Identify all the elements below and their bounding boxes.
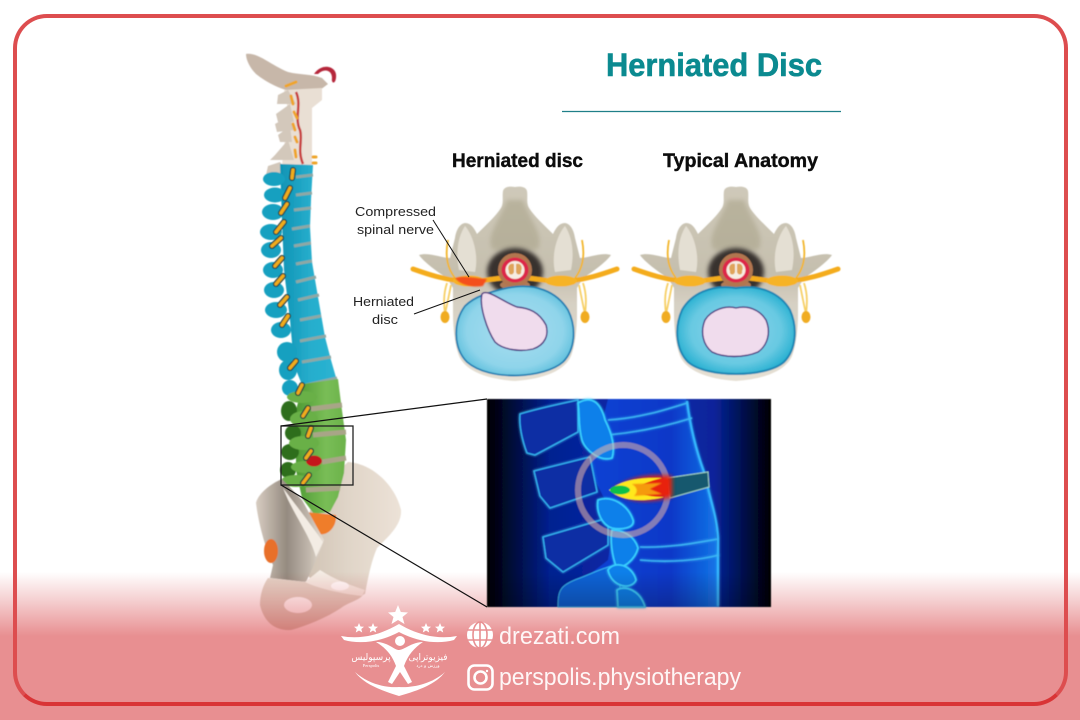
- thoracic discs: [292, 175, 337, 385]
- right ilium: [296, 462, 401, 604]
- atlas: [246, 54, 328, 92]
- logo figure: [376, 636, 423, 684]
- callout box on spine: [281, 426, 353, 485]
- spine model: [246, 54, 401, 630]
- diagram: typical anatomy cross-section: [634, 187, 838, 381]
- nerve roots: [272, 170, 311, 483]
- logo text: [351, 653, 448, 669]
- thoracic body: [280, 164, 337, 392]
- hot spot orange: [632, 483, 662, 496]
- label: herniated disc: disc: [372, 312, 399, 327]
- facet joints: [578, 400, 645, 607]
- heading: typical anatomy: Typical Anatomy: [663, 151, 818, 172]
- logo text: ورزش و درد: [416, 664, 440, 669]
- processes: [520, 400, 608, 572]
- logo text: فیزیوتراپی: [408, 653, 448, 663]
- label: herniated disc: Herniated: [353, 294, 414, 309]
- hot spot yellow: [609, 478, 664, 500]
- sacrum orange: [304, 512, 336, 534]
- logo stars: [354, 605, 445, 632]
- diagram: herniated disc cross-section: [413, 187, 617, 381]
- logo swoosh: [341, 624, 457, 642]
- website text: drezati.com: [499, 623, 620, 650]
- pointer: compressed spinal nerve: [433, 220, 469, 277]
- icon: instagram: [468, 666, 492, 690]
- left ilium: [256, 479, 324, 582]
- disc outlines: [608, 403, 719, 561]
- pointer: herniated disc: [414, 290, 480, 314]
- disc: [677, 287, 795, 374]
- icon: globe: [467, 622, 493, 648]
- lumbar body: [296, 379, 346, 514]
- red herniation blob: [306, 456, 322, 466]
- pubis: [260, 570, 365, 630]
- logo text: Perspolis: [363, 663, 379, 668]
- nucleus: [703, 307, 768, 356]
- instagram handle text: perspolis.physiotherapy: [499, 664, 741, 691]
- nucleus: [481, 293, 547, 350]
- label: herniated disc: [353, 294, 414, 327]
- compressed nerve: [455, 277, 487, 287]
- logo text: پرسپولیس: [351, 653, 391, 663]
- vertebral column: [560, 399, 719, 607]
- disc: [456, 286, 574, 376]
- ring highlight: [578, 445, 668, 535]
- lumbar processes: [280, 401, 301, 478]
- hot spot red: [612, 475, 672, 501]
- x-ray image of lumbar spine: [487, 399, 771, 607]
- hot spot green core: [610, 486, 630, 494]
- title: Herniated Disc: [606, 47, 822, 83]
- logo chevron: [355, 672, 445, 696]
- cervical vertebrae: [282, 88, 322, 165]
- logo: [341, 605, 457, 696]
- label: compressed spinal nerve: Compressed: [355, 204, 436, 219]
- disc band: [667, 472, 709, 498]
- nerve roots shadow: [272, 170, 311, 483]
- label: compressed spinal nerve: [355, 204, 436, 237]
- callout line upper: [281, 399, 487, 426]
- label: compressed spinal nerve: spinal nerve: [357, 222, 434, 237]
- heading: herniated disc: Herniated disc: [452, 151, 583, 172]
- left orange patch: [264, 539, 278, 563]
- lumbar discs: [306, 405, 346, 490]
- callout line lower: [281, 485, 487, 607]
- title underline: [562, 110, 841, 112]
- thoracic spinous processes: [260, 172, 298, 396]
